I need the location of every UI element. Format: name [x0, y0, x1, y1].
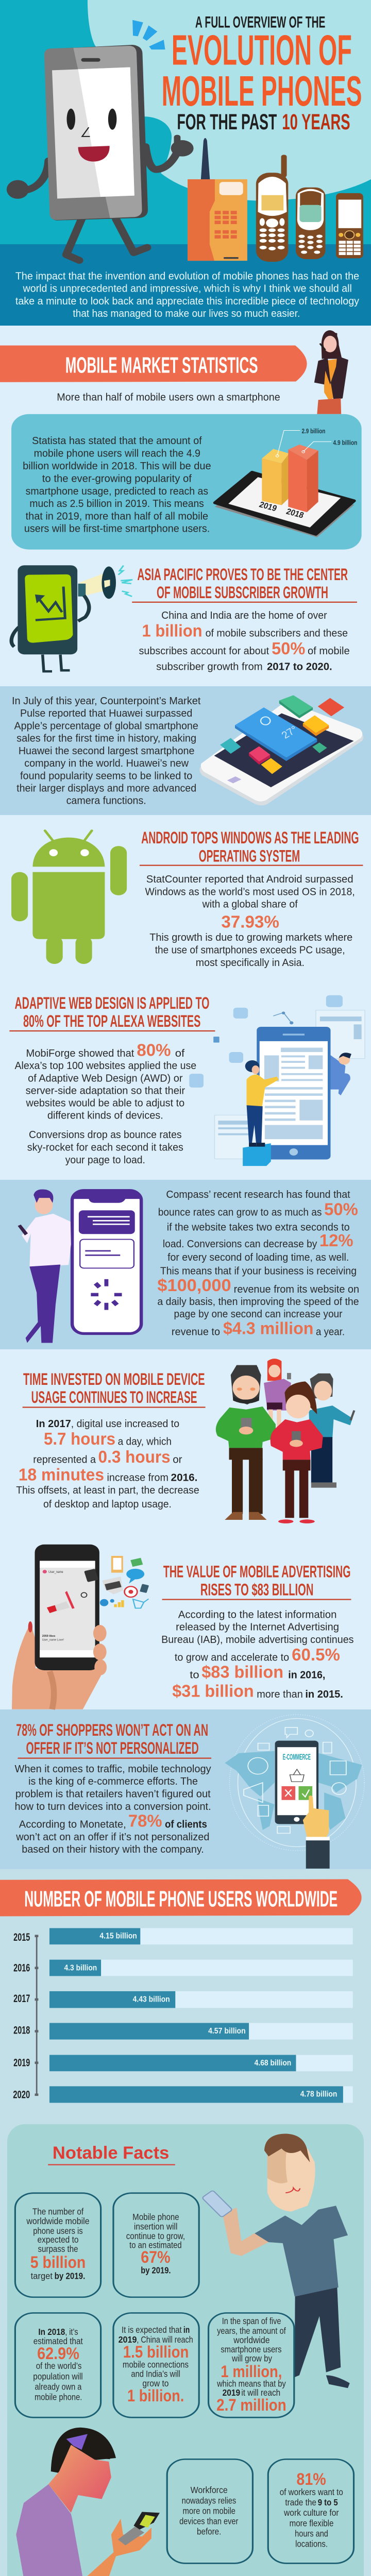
section: mobile market statistics: [0, 330, 362, 672]
card: workforce: nowadays relies: [182, 2496, 236, 2506]
personalization text: problem is that retailers haven’t figured out: [15, 1787, 211, 1800]
advertising text: more than: [257, 1688, 303, 1700]
personalization text: [14, 1762, 211, 1855]
huawei text: In July of this year, Counterpoint’s Market: [12, 694, 201, 706]
illustration: man in blue shirt with phone: [202, 2134, 350, 2388]
heading: personalization: OFFER IF IT’S NOT PERSONALIZED: [26, 1739, 199, 1757]
section: asia pacific: [132, 565, 357, 672]
chart: phone with 3D bars: 2.9 billion: [301, 428, 325, 435]
bar 2017: [13, 1991, 353, 2008]
compass text: [157, 1188, 359, 1338]
card: smartphone users: which means that by: [216, 2379, 286, 2389]
card: world population: mobile phone.: [35, 2392, 82, 2402]
chart: phone with 3D bars: [215, 428, 357, 537]
subtitle: More than half of mobile users own a smartphone: [57, 391, 280, 403]
huawei text: Pulse reported that Huawei surpassed: [20, 707, 192, 719]
heading: 80% OF THE TOP ALEXA WEBSITES: [23, 1012, 200, 1030]
illustration: man beside loading phone: [18, 1190, 141, 1343]
bar 2018: 4.57 billion: [208, 2026, 246, 2035]
icon: keypad phone: [336, 193, 363, 258]
bar 2015: 4.15 billion: [99, 1931, 137, 1940]
personalization text: 78%: [128, 1811, 162, 1831]
card: smartphone users: In the span of five: [222, 2316, 281, 2326]
compass text: 12%: [319, 1230, 353, 1250]
section: mobile advertising: [12, 1545, 364, 1865]
chart: phone with 3D bars: 2019: [258, 500, 278, 513]
huawei text: found popularity seems to be linked to: [20, 769, 192, 782]
time text: 2016.: [171, 1471, 197, 1483]
card: smartphone users: it will reach: [241, 2388, 280, 2398]
icon: blue ticks: [132, 20, 165, 49]
card: workforce: Workforce: [191, 2485, 228, 2496]
card: mobile insertion: by 2019.: [141, 2265, 171, 2276]
bar 2020: [13, 2086, 353, 2103]
asia pacific text: China and India are the home of over: [161, 609, 327, 621]
heading: [9, 994, 215, 1031]
card: smartphone users: smartphone users: [221, 2345, 282, 2354]
time text: or: [173, 1453, 182, 1465]
illustration: people using phones: [216, 1359, 354, 1523]
icon: android robot: [11, 831, 127, 964]
card: world population: In 2018: [38, 2327, 65, 2337]
advertising text: in 2016,: [288, 1668, 325, 1681]
advertising text: $31 billion: [172, 1681, 254, 1701]
personalization text: won’t act on an offer if it’s not personalized: [15, 1831, 209, 1842]
statista text: billion worldwide in 2018. This will be due: [23, 460, 211, 472]
statista text: Statista has stated that the amount of: [32, 434, 202, 447]
huawei text: Apple’s percentage of global smartphone: [14, 720, 198, 732]
asia pacific text: 1 billion: [142, 621, 203, 640]
card: china and india: 1 billion.: [127, 2386, 184, 2405]
section: adaptive web design: [9, 994, 365, 1343]
card: worldwide users: by 2019.: [55, 2271, 85, 2281]
android text: [145, 873, 355, 968]
asia pacific text: [139, 609, 350, 672]
statista text: users will be first-time smartphone users.: [24, 522, 210, 534]
card: worldwide users: target: [31, 2271, 53, 2281]
card: mobile insertion: insertion will: [134, 2222, 177, 2232]
card: mobile insertion: [113, 2193, 199, 2297]
android text: with a global share of: [202, 898, 298, 910]
card: workforce: before.: [197, 2527, 221, 2537]
card: mobile insertion: continue to grow,: [126, 2231, 185, 2241]
huawei text: company in the world. Huawei’s new: [24, 757, 189, 769]
advertising text: According to the latest information: [178, 1608, 336, 1620]
adaptive text: Conversions drop as bounce rates: [29, 1128, 182, 1141]
card: china and india: in: [183, 2325, 190, 2335]
card: china and india: mobile connections: [123, 2360, 189, 2370]
card: china and india: grow to: [142, 2378, 168, 2388]
personalization text: According to Monetate,: [19, 1818, 126, 1830]
time text: 0.3 hours: [98, 1447, 171, 1466]
banner heading: [0, 1879, 362, 1917]
card: worldwide users: 5 billion: [30, 2253, 86, 2272]
adaptive text: MobiForge showed that: [26, 1047, 134, 1059]
statista text: mobile phone users will reach the 4.9: [34, 447, 200, 459]
adaptive text: websites would be able to adjust to: [26, 1097, 184, 1109]
advertising text: $83 billion: [201, 1662, 283, 1682]
asia pacific text: subscribes account for about: [139, 645, 269, 656]
compass text: 50%: [324, 1199, 358, 1219]
illustration: hand holding phone with marketing icons: User_name: [48, 1570, 63, 1574]
adaptive text: server-side adaptation so that their: [26, 1084, 185, 1096]
time text: In 2017: [36, 1417, 71, 1430]
huawei text: [12, 694, 201, 806]
card: smartphone users: years, the amount of: [217, 2326, 286, 2336]
bar 2018: 2018: [13, 2024, 30, 2037]
illustration: e-commerce phone with world map: E-COMMERCE: [283, 1753, 311, 1761]
card: 81 percent workers: trade the: [285, 2498, 316, 2508]
chart: phone with 3D bars: 2018: [285, 506, 305, 520]
title: [162, 13, 362, 134]
android text: most specifically in Asia.: [196, 956, 305, 968]
card: smartphone users: 2.7 million: [216, 2396, 286, 2414]
advertising text: released by the Internet Advertising: [176, 1621, 339, 1633]
adaptive text: of: [175, 1047, 185, 1059]
section: header hero: [7, 0, 371, 319]
personalization text: is the king of e-commerce efforts. The: [28, 1775, 198, 1787]
card: 81 percent workers: of workers want to: [280, 2487, 343, 2497]
asia pacific text: subscriber growth from: [156, 660, 263, 672]
time text: increase from: [107, 1471, 168, 1483]
timeline axis: [35, 1935, 38, 2096]
card: mobile insertion: Mobile phone: [132, 2212, 179, 2223]
compass text: bounce rates can grow to as much as: [158, 1206, 322, 1218]
chart: phone with 3D bars: 4.9 billion: [333, 439, 357, 447]
advertising text: to grow and accelerate to: [175, 1651, 289, 1663]
advertising text: in 2015.: [305, 1688, 343, 1700]
illustration: woman on phone: [314, 330, 348, 414]
bar 2018: [13, 2023, 353, 2040]
card: worldwide users: The number of: [32, 2207, 84, 2217]
huawei text: their larger displays and more advanced: [16, 782, 196, 794]
compass text: revenue to: [172, 1326, 220, 1337]
title: FOR THE PAST: [177, 110, 277, 134]
compass text: load. Conversions can decrease by: [163, 1238, 317, 1249]
card: 81 percent workers: work culture for: [283, 2508, 339, 2518]
heading: notable facts: Notable Facts: [53, 2143, 169, 2163]
intro paragraph: [15, 270, 360, 319]
banner heading: [0, 346, 307, 382]
bar 2016: 2016: [13, 1962, 30, 1974]
card: china and india: 2019: [119, 2335, 137, 2345]
advertising text: 60.5%: [292, 1645, 340, 1664]
card: worldwide users: expected to: [38, 2234, 78, 2245]
heading: USAGE CONTINUES TO INCREASE: [31, 1388, 197, 1406]
card: china and india: , China will reach: [137, 2335, 193, 2345]
card: smartphone users: [209, 2313, 294, 2417]
card: smartphone users: worldwide: [233, 2335, 269, 2346]
statista text: that in 2019, more than half of all mobile: [26, 510, 208, 522]
android text: 37.93%: [221, 912, 279, 931]
card: smartphone users: 1 million,: [221, 2362, 282, 2381]
icon: smiling smartphone character: [7, 45, 194, 260]
bar 2019: 2019: [13, 2057, 30, 2069]
bar 2015: 2015: [13, 1931, 30, 1943]
card: mobile insertion: 67%: [141, 2248, 171, 2266]
card: china and india: 1.5 billion: [123, 2343, 189, 2361]
bar 2020: 4.78 billion: [300, 2089, 337, 2098]
time text: This offsets, at least in part, the decrease: [16, 1484, 199, 1496]
adaptive text: Alexa’s top 100 websites applied the use: [14, 1059, 196, 1071]
panel: statista: [11, 414, 362, 550]
time text: 18 minutes: [19, 1465, 104, 1484]
card: 81 percent workers: more flexible: [290, 2518, 333, 2529]
card: workforce: devices than ever: [179, 2516, 239, 2527]
icon: classic brick nokia: [296, 188, 325, 259]
card: world population: 62.9%: [37, 2344, 79, 2363]
huawei text: sales for the first time in history, making: [16, 732, 196, 744]
card: worldwide users: surpass the: [38, 2244, 78, 2255]
card: world population: estimated that: [33, 2336, 83, 2346]
heading: TIME INVESTED ON MOBILE DEVICE: [23, 1370, 205, 1388]
adaptive text: different kinds of devices.: [47, 1109, 163, 1121]
section: notable facts lower cards: [0, 2428, 362, 2576]
card: 81 percent workers: 81%: [296, 2470, 326, 2488]
heading: android: [140, 828, 363, 866]
card: world population: [15, 2313, 101, 2417]
personalization text: When it comes to traffic, mobile technology: [14, 1762, 211, 1775]
icon: old candybar phone: [256, 155, 288, 262]
statista text: smartphone usage, predicted to reach as: [26, 485, 208, 497]
statista text: much as 2.5 billion in 2019. This means: [29, 497, 204, 509]
illustration: hand holding phone with marketing icons: 2059 likes: [42, 1634, 56, 1638]
card: worldwide users: [15, 2193, 101, 2297]
time text: represented a: [33, 1453, 96, 1465]
huawei text: camera functions.: [66, 794, 146, 806]
bar 2016: 4.3 billion: [64, 1963, 97, 1972]
huawei text: Huawei the second largest smartphone: [19, 744, 194, 756]
bar 2016: [13, 1960, 353, 1976]
personalization text: how to turn devices into a conversion point.: [14, 1800, 211, 1812]
light circle backdrop: [88, 0, 371, 201]
bar 2017: 2017: [13, 1993, 30, 2005]
heading: [162, 1562, 351, 1600]
statista text: [23, 434, 211, 534]
bar 2019: 4.68 billion: [255, 2058, 291, 2067]
illustration: isometric phone with app blocks: 27°: [279, 724, 300, 741]
asia pacific text: of mobile: [308, 645, 350, 656]
adaptive text: sky-rocket for each second it takes: [27, 1141, 183, 1153]
card: 81 percent workers: hours and: [295, 2529, 328, 2539]
card: 81 percent workers: 9 to 5: [318, 2498, 338, 2508]
illustration: hand holding phone with marketing icons: [12, 1545, 149, 1709]
card: mobile insertion: to an estimated: [129, 2240, 182, 2250]
heading: personalization: [16, 1721, 211, 1759]
card: 81 percent workers: locations.: [295, 2539, 328, 2549]
adaptive text: of Adaptive Web Design (AWD) or: [28, 1072, 183, 1084]
bar 2019: [13, 2055, 353, 2071]
illustration: man in purple shirt with flip phone: [16, 2428, 160, 2576]
compass text: $4.3 million: [223, 1318, 313, 1338]
section: number of mobile phone users chart: [0, 1865, 362, 2165]
time text: [16, 1417, 199, 1510]
adaptive text: 80%: [137, 1040, 171, 1060]
illustration: e-commerce phone with world map: [225, 1715, 364, 1865]
card: 81 percent workers: [268, 2459, 354, 2563]
section: huawei: [11, 694, 363, 968]
card: workforce: [167, 2459, 252, 2563]
heading: [132, 565, 357, 603]
card: smartphone users: 2019: [223, 2388, 240, 2398]
card: china and india: and India’s will: [131, 2369, 180, 2379]
card: world population: already own a: [35, 2382, 82, 2392]
time text: a day, which: [118, 1435, 172, 1447]
advertising text: [161, 1608, 354, 1701]
compass text: a year.: [316, 1326, 345, 1337]
icon: megaphone phone character: [11, 565, 132, 671]
heading: [23, 1370, 206, 1408]
card: world population: population will: [33, 2371, 83, 2382]
card: workforce: more on mobile: [183, 2506, 235, 2516]
card: world population: of the world’s: [36, 2361, 82, 2371]
illustration: isometric phone with app blocks: [199, 695, 363, 805]
compass text: $100,000: [157, 1275, 231, 1295]
card: china and india: [113, 2313, 199, 2417]
adaptive text: [14, 1040, 196, 1165]
illustration: hand holding phone with marketing icons: User_name Love!: [42, 1638, 64, 1641]
personalization text: of clients: [165, 1818, 207, 1830]
personalization text: based on their history with the company.: [22, 1843, 204, 1855]
bar 2015: [13, 1928, 353, 1944]
bar 2017: 4.43 billion: [133, 1994, 170, 2004]
adaptive text: your page to load.: [65, 1154, 145, 1165]
time text: of desktop and laptop usage.: [43, 1498, 172, 1510]
advertising text: to: [190, 1668, 199, 1681]
asia pacific text: 50%: [272, 638, 305, 658]
bar 2020: 2020: [13, 2089, 30, 2101]
icon: brick phone: [188, 138, 247, 261]
intro paragraph: that has managed to make our lives so much easier.: [73, 307, 300, 319]
illustration: adaptive web design phone and people: [189, 995, 365, 1166]
section: time invested: [16, 1359, 354, 1523]
card: worldwide users: worldwide mobile: [26, 2216, 90, 2226]
time text: 5.7 hours: [44, 1429, 115, 1448]
card: worldwide users: phone users is: [33, 2226, 83, 2236]
card: world population: , it’s: [65, 2327, 78, 2337]
section: notable facts cards: [15, 2134, 350, 2417]
asia pacific text: 2017 to 2020.: [267, 660, 332, 672]
time text: , digital use increased to: [71, 1417, 179, 1430]
chart: users per year: [13, 1928, 353, 2103]
statista text: to the ever-growing popularity of: [42, 472, 192, 484]
card: china and india: It is expected that: [122, 2325, 182, 2335]
card: smartphone users: will grow by: [231, 2353, 272, 2364]
